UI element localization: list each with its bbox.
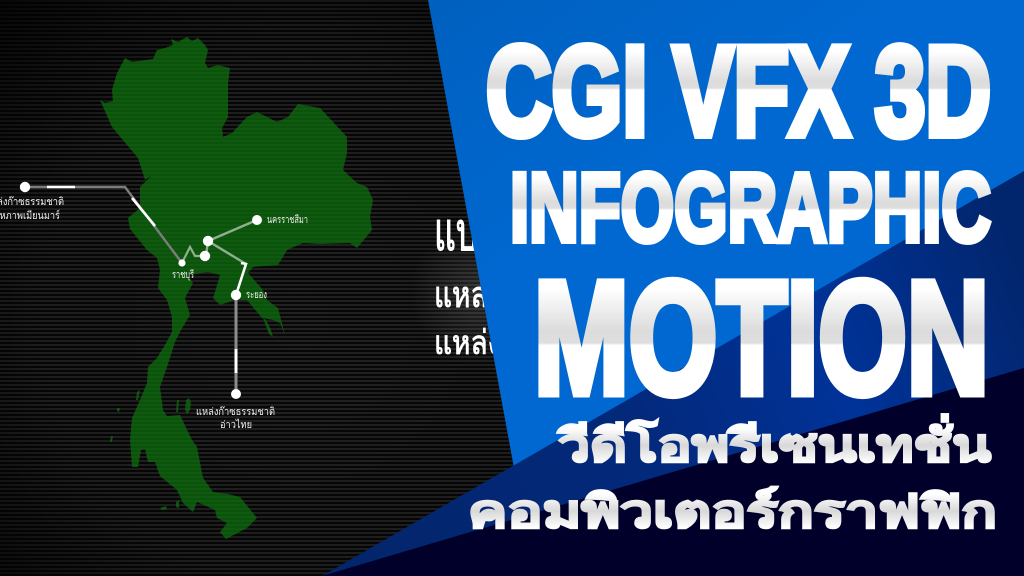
panel: bright blue diagonal bbox=[428, 0, 1024, 468]
label: Gulf of Thailand gas field bbox=[196, 405, 275, 431]
panel: medium blue diagonal band bbox=[322, 171, 1024, 576]
label: Gulf of Thailand gas field: แหล่งก๊าซธรรมชาติ bbox=[196, 405, 275, 418]
line: Myanmar to Ratchaburi bbox=[25, 187, 182, 263]
connector lines bbox=[25, 187, 257, 394]
label: Ratchaburi: ราชบุรี bbox=[172, 268, 194, 281]
panel: dark navy corner bbox=[322, 368, 1024, 576]
partly hidden text block: แหล่งก๊าซ bbox=[434, 324, 553, 362]
subtitle line 2: คอมพิวเตอร์กราฟฟิก bbox=[468, 486, 997, 537]
line: Rayong to Gulf of Thailand bbox=[234, 295, 238, 394]
line: Ratchaburi to centre bbox=[182, 247, 205, 263]
map labels bbox=[0, 195, 308, 431]
map of Thailand bbox=[100, 37, 373, 539]
location dots bbox=[20, 182, 262, 399]
partly hidden text block bbox=[434, 204, 558, 362]
subtitle line 1: วีดีโอพรีเซนเทชั่น bbox=[557, 414, 991, 471]
partly hidden text block: แบ่งตาม bbox=[434, 204, 558, 262]
label: Rayong: ระยอง bbox=[246, 289, 267, 301]
label: Myanmar gas field bbox=[0, 195, 64, 222]
label: Gulf of Thailand gas field: อ่าวไทย bbox=[220, 418, 252, 431]
line: centre to Rayong bbox=[208, 241, 246, 295]
line: centre to Nakhon Ratchasima bbox=[206, 220, 257, 256]
label: Nakhon Ratchasima: นครราชสีมา bbox=[267, 213, 308, 226]
partly hidden text block: แหล่งก๊าซ bbox=[434, 275, 553, 315]
